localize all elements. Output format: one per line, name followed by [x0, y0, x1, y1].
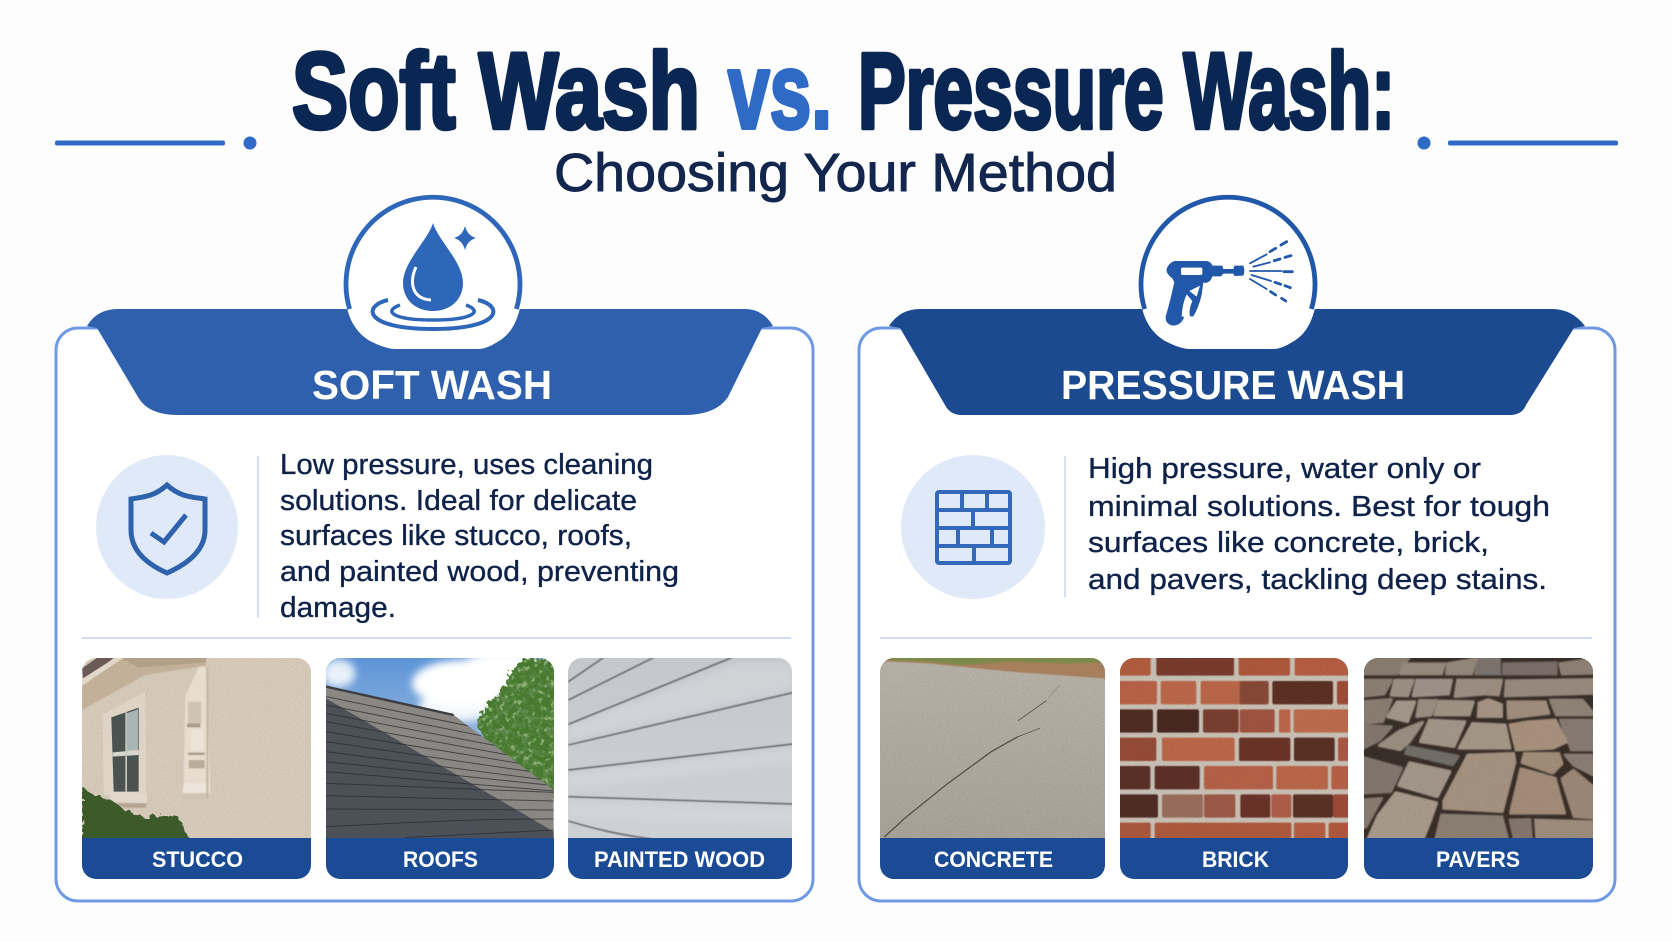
left title ornament	[55, 136, 256, 150]
main title: vs.	[728, 30, 832, 151]
label: brick	[1120, 838, 1348, 880]
icon: shield with check	[96, 455, 238, 599]
description text: surfaces like stucco, roofs,	[280, 520, 632, 552]
description text: and painted wood, preventing	[280, 556, 679, 588]
label: roofs: ROOFS	[403, 847, 478, 872]
panel outline	[56, 328, 813, 901]
description text: and pavers, tackling deep stains.	[1088, 564, 1547, 596]
card: roofs	[322, 652, 559, 880]
label: stucco: STUCCO	[152, 847, 243, 872]
card: pavers	[1360, 655, 1597, 880]
label: stucco	[82, 838, 311, 880]
description text: minimal solutions. Best for tough	[1088, 491, 1550, 523]
label: roofs	[326, 838, 554, 880]
label: painted wood: PAINTED WOOD	[594, 847, 765, 872]
card: stucco	[82, 655, 312, 880]
label: painted wood	[568, 838, 792, 880]
label: pavers: PAVERS	[1436, 847, 1520, 872]
card: concrete	[878, 655, 1111, 880]
label: concrete	[880, 838, 1105, 880]
description text: High pressure, water only or	[1088, 453, 1481, 485]
label: concrete: CONCRETE	[934, 847, 1053, 872]
banner heading: PRESSURE WASH	[1061, 362, 1405, 408]
description text	[280, 449, 679, 624]
description text: Low pressure, uses cleaning	[280, 449, 653, 481]
banner heading: SOFT WASH	[312, 362, 552, 408]
description text	[1088, 453, 1550, 596]
description divider	[257, 456, 259, 618]
description text: surfaces like concrete, brick,	[1088, 527, 1489, 559]
icon badge: pressure washer gun	[1141, 197, 1315, 349]
main title	[292, 30, 1395, 151]
icon badge: water drop	[346, 197, 520, 349]
label: brick: BRICK	[1202, 847, 1269, 872]
card: painted wood	[565, 655, 798, 880]
title block	[292, 30, 1395, 203]
label: pavers	[1364, 838, 1593, 880]
right title ornament	[1418, 136, 1618, 150]
description text: damage.	[280, 592, 396, 624]
header banner	[87, 309, 773, 415]
main title: Soft Wash	[292, 30, 700, 151]
panel outline	[859, 328, 1615, 901]
card: brick	[1118, 655, 1351, 880]
section rule	[880, 637, 1592, 639]
section rule	[82, 637, 791, 639]
panel: soft wash	[56, 197, 813, 901]
header banner	[889, 309, 1585, 415]
description divider	[1064, 456, 1066, 597]
icon: brick wall	[901, 455, 1045, 599]
panel: pressure wash	[859, 197, 1615, 901]
description text: solutions. Ideal for delicate	[280, 485, 637, 517]
main title: Pressure Wash:	[858, 30, 1395, 151]
subtitle: Choosing Your Method	[554, 143, 1117, 203]
